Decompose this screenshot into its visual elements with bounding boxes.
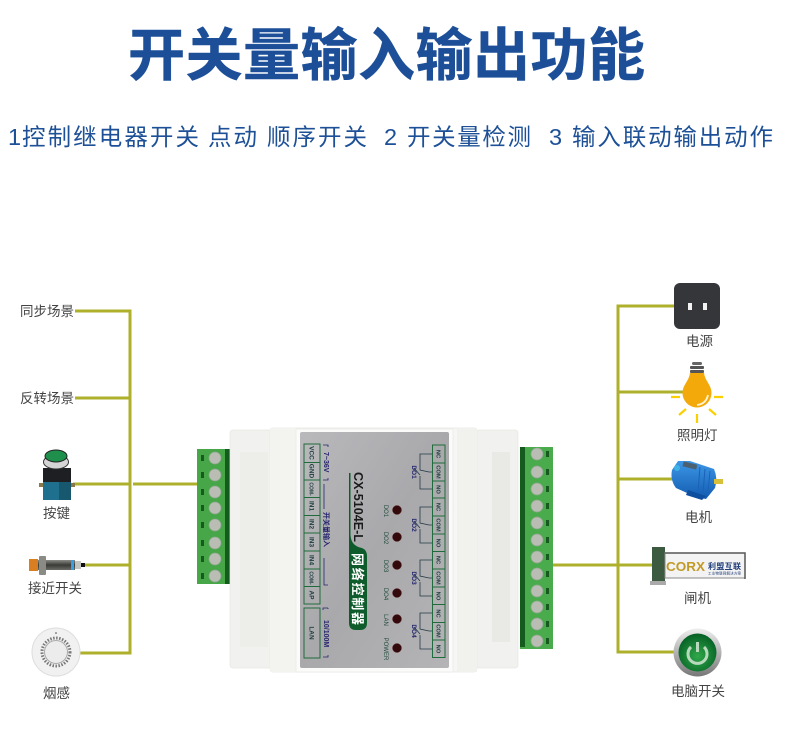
right terminal block [520,447,553,649]
wiring: left input bus [73,310,197,654]
label: 烟感: 烟感 [43,685,70,701]
input annotation text [322,452,331,647]
relay output strip text: NC [434,609,440,618]
left strip text: AP [308,590,314,600]
relay channel labels: DO3 [410,571,417,585]
model name: CX-5104E-L [351,472,366,542]
subtitle: function list: 顺序开关 [267,124,367,150]
left strip text: LAN [308,626,314,640]
label: 电源: 电源 [686,334,714,349]
icon: proximity switch [29,556,85,575]
relay output strip text: NC [434,450,440,459]
relay output strip text: COM [434,465,440,479]
subtitle: function list: 点动 [208,124,257,150]
relay symbols [414,454,432,649]
relay channel labels: DO2 [410,518,417,532]
relay output strip text: NC [434,503,440,512]
label: 反转场景: 反转场景 [20,391,74,406]
wiring: right output bus [553,304,686,654]
left strip text: IN4 [308,555,314,565]
label: 接近开关: 接近开关 [28,580,82,596]
left strip text: IN2 [308,519,314,529]
input annotation text: 7~36V [322,452,329,473]
LED labels [382,505,388,661]
relay channel labels: DO1 [410,465,417,479]
left terminal block [197,449,230,584]
icon: smoke detector [32,628,80,676]
white housing [230,428,518,672]
subtitle: function list: 控制继电器开关 [22,124,199,150]
icon: barrier gate: 利盟互联 [708,561,741,571]
label: 电机: 电机 [685,510,712,525]
input annotation text: 10/100M [322,620,329,647]
left strip text: IN1 [308,501,314,511]
input annotation text: 开关量输入 [322,512,331,547]
relay output strip text: NO [434,485,440,494]
product name badge [349,473,367,630]
LED labels: DO1 [382,505,388,518]
relay output strip text: NC [434,556,440,565]
LED labels: POWER [382,638,388,661]
label: 闸机: 闸机 [684,591,712,606]
LED labels: DO4 [382,588,388,601]
subtitle: function list: 3 [549,124,562,150]
left strip text [308,446,314,640]
left terminal label strip [304,444,320,658]
relay channel labels: DO4 [410,624,417,638]
LED labels: DO2 [382,532,388,545]
left strip text: VCC [308,446,314,460]
left strip text: GND [308,464,314,479]
status LEDs [392,506,402,652]
left strip text: COM- [308,571,314,585]
icon: barrier gate: CORX [666,559,705,574]
product name badge: 网络控制器 [350,553,365,625]
relay output strip text: NO [434,539,440,548]
icon: barrier gate: 工业物联网解决方案 [708,570,742,576]
relay channel labels [410,465,417,638]
left strip text: IN3 [308,537,314,547]
subtitle: function list: 1 [8,124,21,150]
input annotation brackets [323,445,328,657]
relay output strip text: COM [434,518,440,532]
label: 同步场景: 同步场景 [20,304,74,319]
relay output strip text: NO [434,592,440,601]
relay output strip text [434,450,440,654]
LED labels: LAN [382,614,388,626]
icon: push button [39,450,75,500]
icon: motor [672,461,723,500]
icon: barrier gate [650,547,745,585]
LED labels: DO3 [382,560,388,573]
title: 开关量输入输出功能 [128,24,645,88]
relay output strip text: NO [434,645,440,654]
label: 照明灯: 照明灯 [677,428,718,443]
relay output strip text: COM [434,571,440,585]
icon: light bulb [671,362,723,423]
subtitle: function list [8,124,773,150]
left strip text: COM- [308,482,314,496]
subtitle: function list: 开关量检测 [407,124,531,150]
subtitle: function list: 2 [384,124,397,150]
label: 电脑开关: 电脑开关 [671,684,725,699]
icon: computer power button [674,628,722,676]
label: 按键: 按键 [43,506,70,521]
subtitle: function list: 输入联动输出动作 [572,124,773,150]
relay output strip text: COM [434,624,440,638]
icon: power socket [674,283,720,329]
silver front panel [300,432,449,668]
relay output label strip [432,445,445,658]
device: controller module [197,428,553,672]
